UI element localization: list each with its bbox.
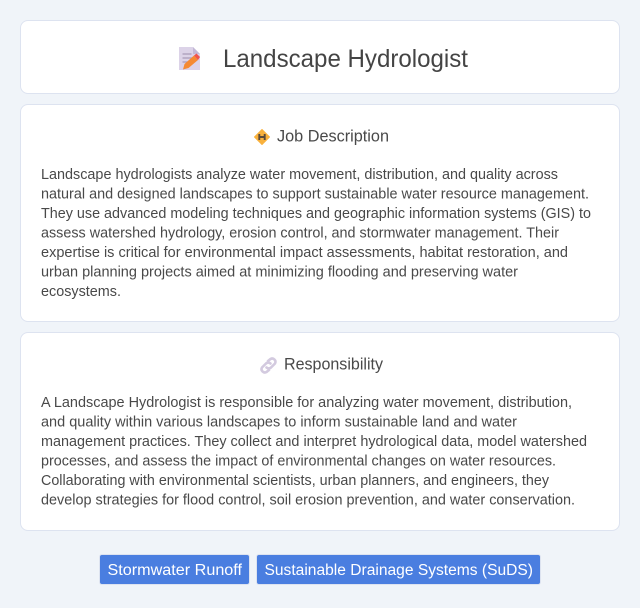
- text block: responsibility: management practices. They collect and interpret hydrological data, model watershed: [41, 434, 587, 450]
- tag: Stormwater Runoff: Stormwater Runoff: [108, 562, 243, 579]
- text block: responsibility: develop strategies for flood control, soil erosion prevention, and water conservation.: [41, 492, 575, 508]
- text block: responsibility: Collaborating with environmental scientists, urban planners, and engineers, they: [41, 473, 550, 489]
- tag: Sustainable Drainage Systems (SuDS): Sustainable Drainage Systems (SuDS): [264, 562, 533, 579]
- text block: job description: ecosystems.: [41, 284, 121, 300]
- text block: job description: urban planning projects aimed at minimizing flooding and preserving water: [41, 264, 518, 280]
- text block: job description: natural and designed landscapes to support sustainable water resource management.: [41, 186, 589, 202]
- panel: title card: [20, 20, 620, 94]
- title: Landscape Hydrologist: [223, 45, 468, 73]
- text block: job description: Landscape hydrologists analyze water movement, distribution, and quality across: [41, 167, 558, 183]
- panel: responsibility: [20, 332, 620, 531]
- text block: responsibility: A Landscape Hydrologist is responsible for analyzing water movement, distribution,: [41, 395, 572, 411]
- text block: job description: assess watershed hydrology, erosion control, and stormwater management. Their: [41, 226, 559, 242]
- tag: Stormwater Runoff: [100, 555, 249, 584]
- text block: job description: They use advanced modeling techniques and geographic information systems (GIS) to: [41, 206, 591, 222]
- text block: responsibility: processes, and assess the impact of environmental changes on water resources.: [41, 454, 556, 470]
- heading: job description: Job Description: [277, 128, 389, 146]
- text block: responsibility: and quality within various landscapes to inform sustainable land and water: [41, 414, 517, 430]
- panel: job description: [20, 104, 620, 322]
- heading: responsibility: Responsibility: [284, 356, 384, 374]
- tag: Sustainable Drainage Systems (SuDS): [257, 555, 540, 584]
- text block: job description: expertise is critical for environmental impact assessments, habitat restoration, and: [41, 245, 568, 261]
